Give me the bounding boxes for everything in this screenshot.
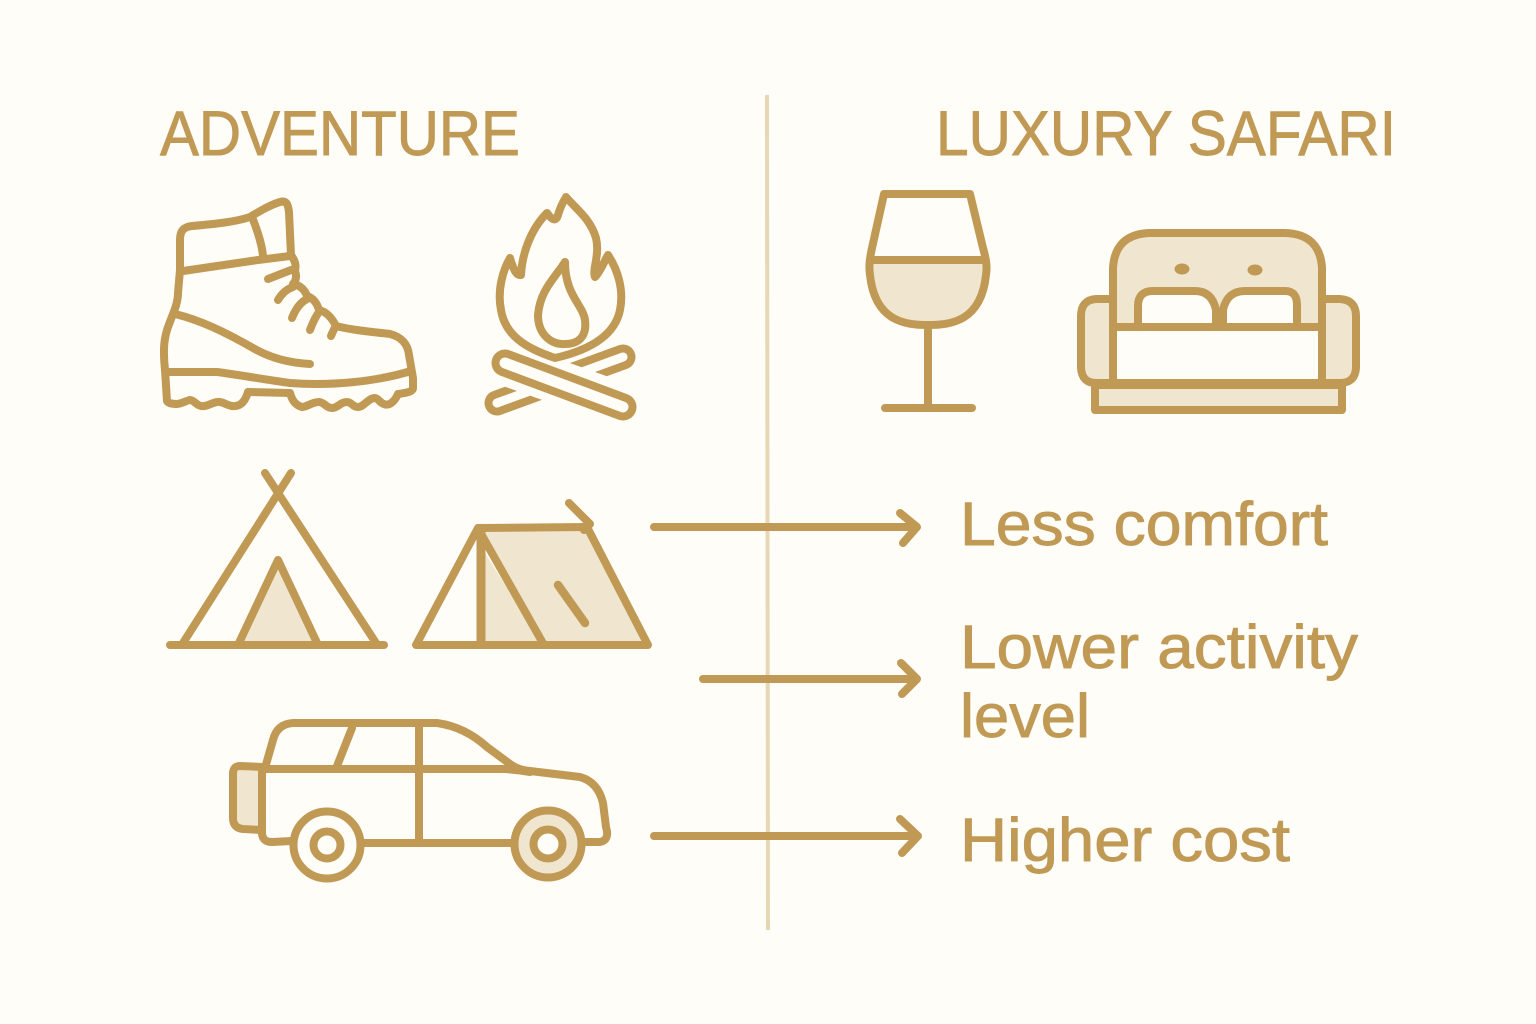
icon: bed sofa	[1081, 233, 1356, 410]
arrow: higher cost	[654, 819, 918, 853]
text: lower activity level: level	[960, 682, 1090, 750]
text: lower activity level: Lower activity	[960, 613, 1359, 681]
icon: safari vehicle	[233, 723, 607, 878]
icon: wine glass	[869, 194, 987, 408]
arrow: less comfort	[654, 513, 917, 543]
heading: adventure: ADVENTURE	[160, 99, 520, 169]
text: higher cost: Higher cost	[960, 806, 1290, 874]
text: lower activity level	[960, 613, 1359, 750]
heading: luxury safari: LUXURY SAFARI	[936, 99, 1396, 169]
icon: campfire	[497, 197, 623, 407]
text: less comfort: Less comfort	[960, 490, 1328, 558]
icon: hiking boot	[164, 202, 413, 408]
arrow: lower activity level	[703, 663, 917, 694]
icon: ridge tent	[416, 503, 648, 645]
icon: tipi tent	[170, 473, 384, 645]
